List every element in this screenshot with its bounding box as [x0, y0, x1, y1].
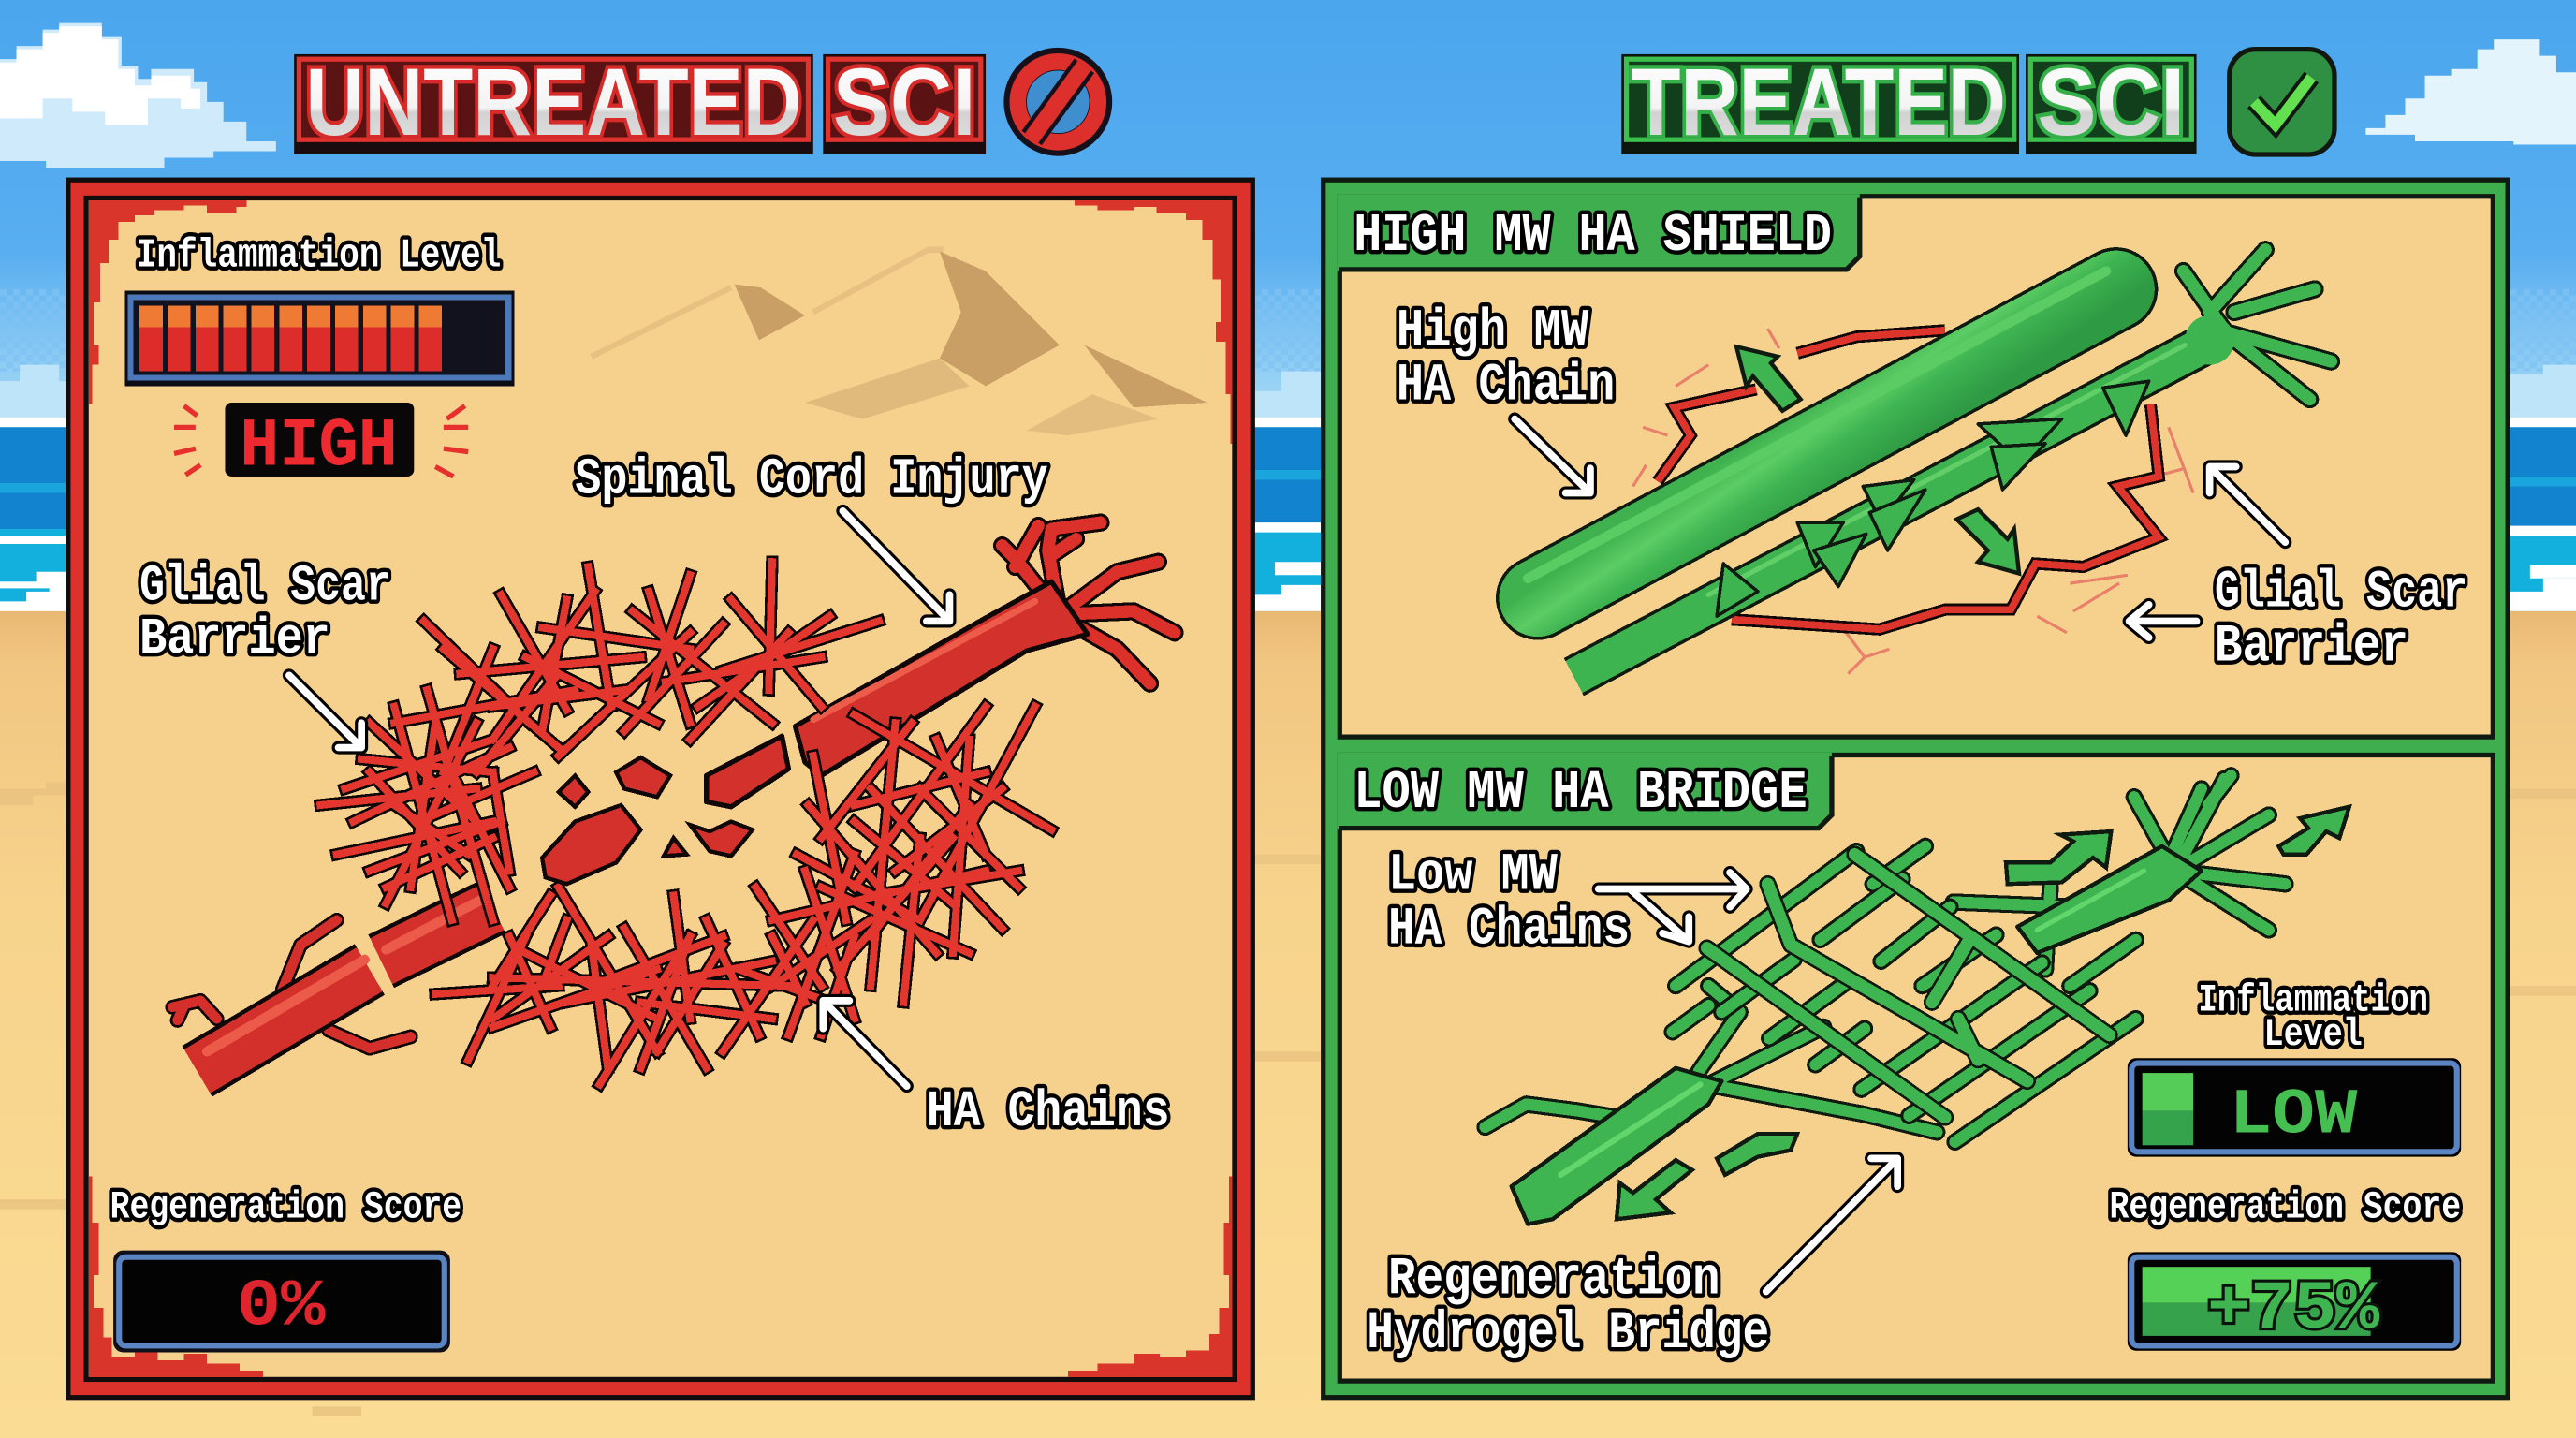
regenerating nerve with branches — [1573, 250, 2331, 677]
cloud right — [2365, 39, 2576, 144]
arrow: glial scar up-left — [2210, 466, 2285, 542]
arrow: glial scar left — [2130, 605, 2197, 638]
cloud left highlight — [0, 26, 200, 125]
arrow: spinal cord injury — [842, 511, 949, 621]
label: high MW HA chain — [1397, 301, 1615, 415]
label: high MW HA chain: High MW — [1397, 301, 1588, 361]
green growth arrows — [1617, 807, 2349, 1219]
red scar remnants — [1633, 329, 2193, 674]
high badge: HIGH — [240, 409, 398, 487]
arrow: glial scar barrier — [289, 675, 361, 748]
title: untreated: UNTREATED — [305, 49, 801, 155]
nerve below lattice with branches — [1486, 775, 2285, 1225]
icon: check mark — [2230, 50, 2334, 154]
arrow: high MW HA chain — [1515, 419, 1590, 493]
inflammation level label: Inflammation Level — [137, 232, 501, 279]
label: low MW HA chains — [1388, 845, 1630, 959]
panel: treated SCI — [1324, 180, 2508, 1398]
sand dunes — [592, 250, 1208, 435]
broken cord fragments — [542, 757, 753, 884]
inflammation level label right: Inflammation — [2198, 977, 2428, 1022]
title: untreated: SCI — [833, 49, 976, 155]
title: treated: TREATED — [1632, 49, 2006, 155]
label: glial scar barrier right: Glial Scar — [2215, 563, 2467, 623]
label: glial scar barrier: Glial Scar — [139, 559, 391, 616]
arrow: hydrogel bridge — [1766, 1158, 1897, 1292]
inflammation gauge: low — [2128, 1058, 2461, 1157]
spinal cord lower segment — [172, 897, 493, 1071]
label: high MW HA chain: HA Chain — [1397, 355, 1615, 415]
inflammation gauge: low: LOW — [2230, 1078, 2359, 1152]
label: regeneration hydrogel bridge: Regeneration — [1388, 1249, 1720, 1309]
tab: low MW HA bridge: LOW MW HA BRIDGE — [1354, 763, 1808, 824]
label: HA chains: HA Chains — [927, 1084, 1170, 1141]
sub-panel: high MW HA shield — [1338, 194, 2493, 737]
inflammation gauge: high — [124, 291, 514, 386]
label: regeneration hydrogel bridge — [1367, 1249, 1769, 1363]
glial scar and HA chains tangle — [320, 562, 1051, 1084]
label: regeneration hydrogel bridge: Hydrogel Bridge — [1367, 1303, 1769, 1363]
regeneration score box: 0%: 0% — [237, 1271, 326, 1345]
label: glial scar barrier: Barrier — [139, 611, 330, 668]
title: treated: SCI — [2037, 49, 2185, 155]
alarm ticks — [174, 406, 468, 477]
icon: prohibited — [1016, 59, 1101, 144]
label: low MW HA chains: HA Chains — [1388, 899, 1630, 959]
regeneration score box: +75%: +75% — [2207, 1271, 2380, 1349]
sub-panel: low MW HA bridge — [1338, 753, 2493, 1381]
spinal cord upper segment with hand — [707, 522, 1175, 807]
label: glial scar barrier right — [2215, 563, 2467, 677]
regeneration score label right: Regeneration Score — [2110, 1185, 2461, 1230]
arrow: green up-left — [1736, 346, 1801, 411]
arrows: low MW HA chains — [1599, 873, 1747, 942]
label: glial scar barrier — [139, 559, 391, 668]
tab: high MW HA shield: HIGH MW HA SHIELD — [1354, 206, 1832, 267]
regeneration score box: 0% — [115, 1252, 448, 1351]
inflammation level label right — [2198, 977, 2428, 1057]
label: spinal cord injury: Spinal Cord Injury — [575, 452, 1048, 509]
arrow: HA chains — [823, 1001, 907, 1086]
regeneration score box: +75% — [2128, 1252, 2461, 1351]
grunge red corners — [89, 200, 1232, 1377]
hydrogel bridge lattice — [1673, 846, 2136, 1142]
panel: untreated SCI — [68, 180, 1252, 1398]
arrow: green down-right — [1956, 509, 2019, 574]
label: glial scar barrier right: Barrier — [2215, 617, 2408, 677]
regeneration score label: Regeneration Score — [110, 1185, 461, 1230]
cloud left — [0, 23, 276, 168]
label: low MW HA chains: Low MW — [1388, 845, 1558, 905]
inflammation level label right: Level — [2264, 1012, 2363, 1057]
high MW HA rod — [1528, 271, 2116, 598]
